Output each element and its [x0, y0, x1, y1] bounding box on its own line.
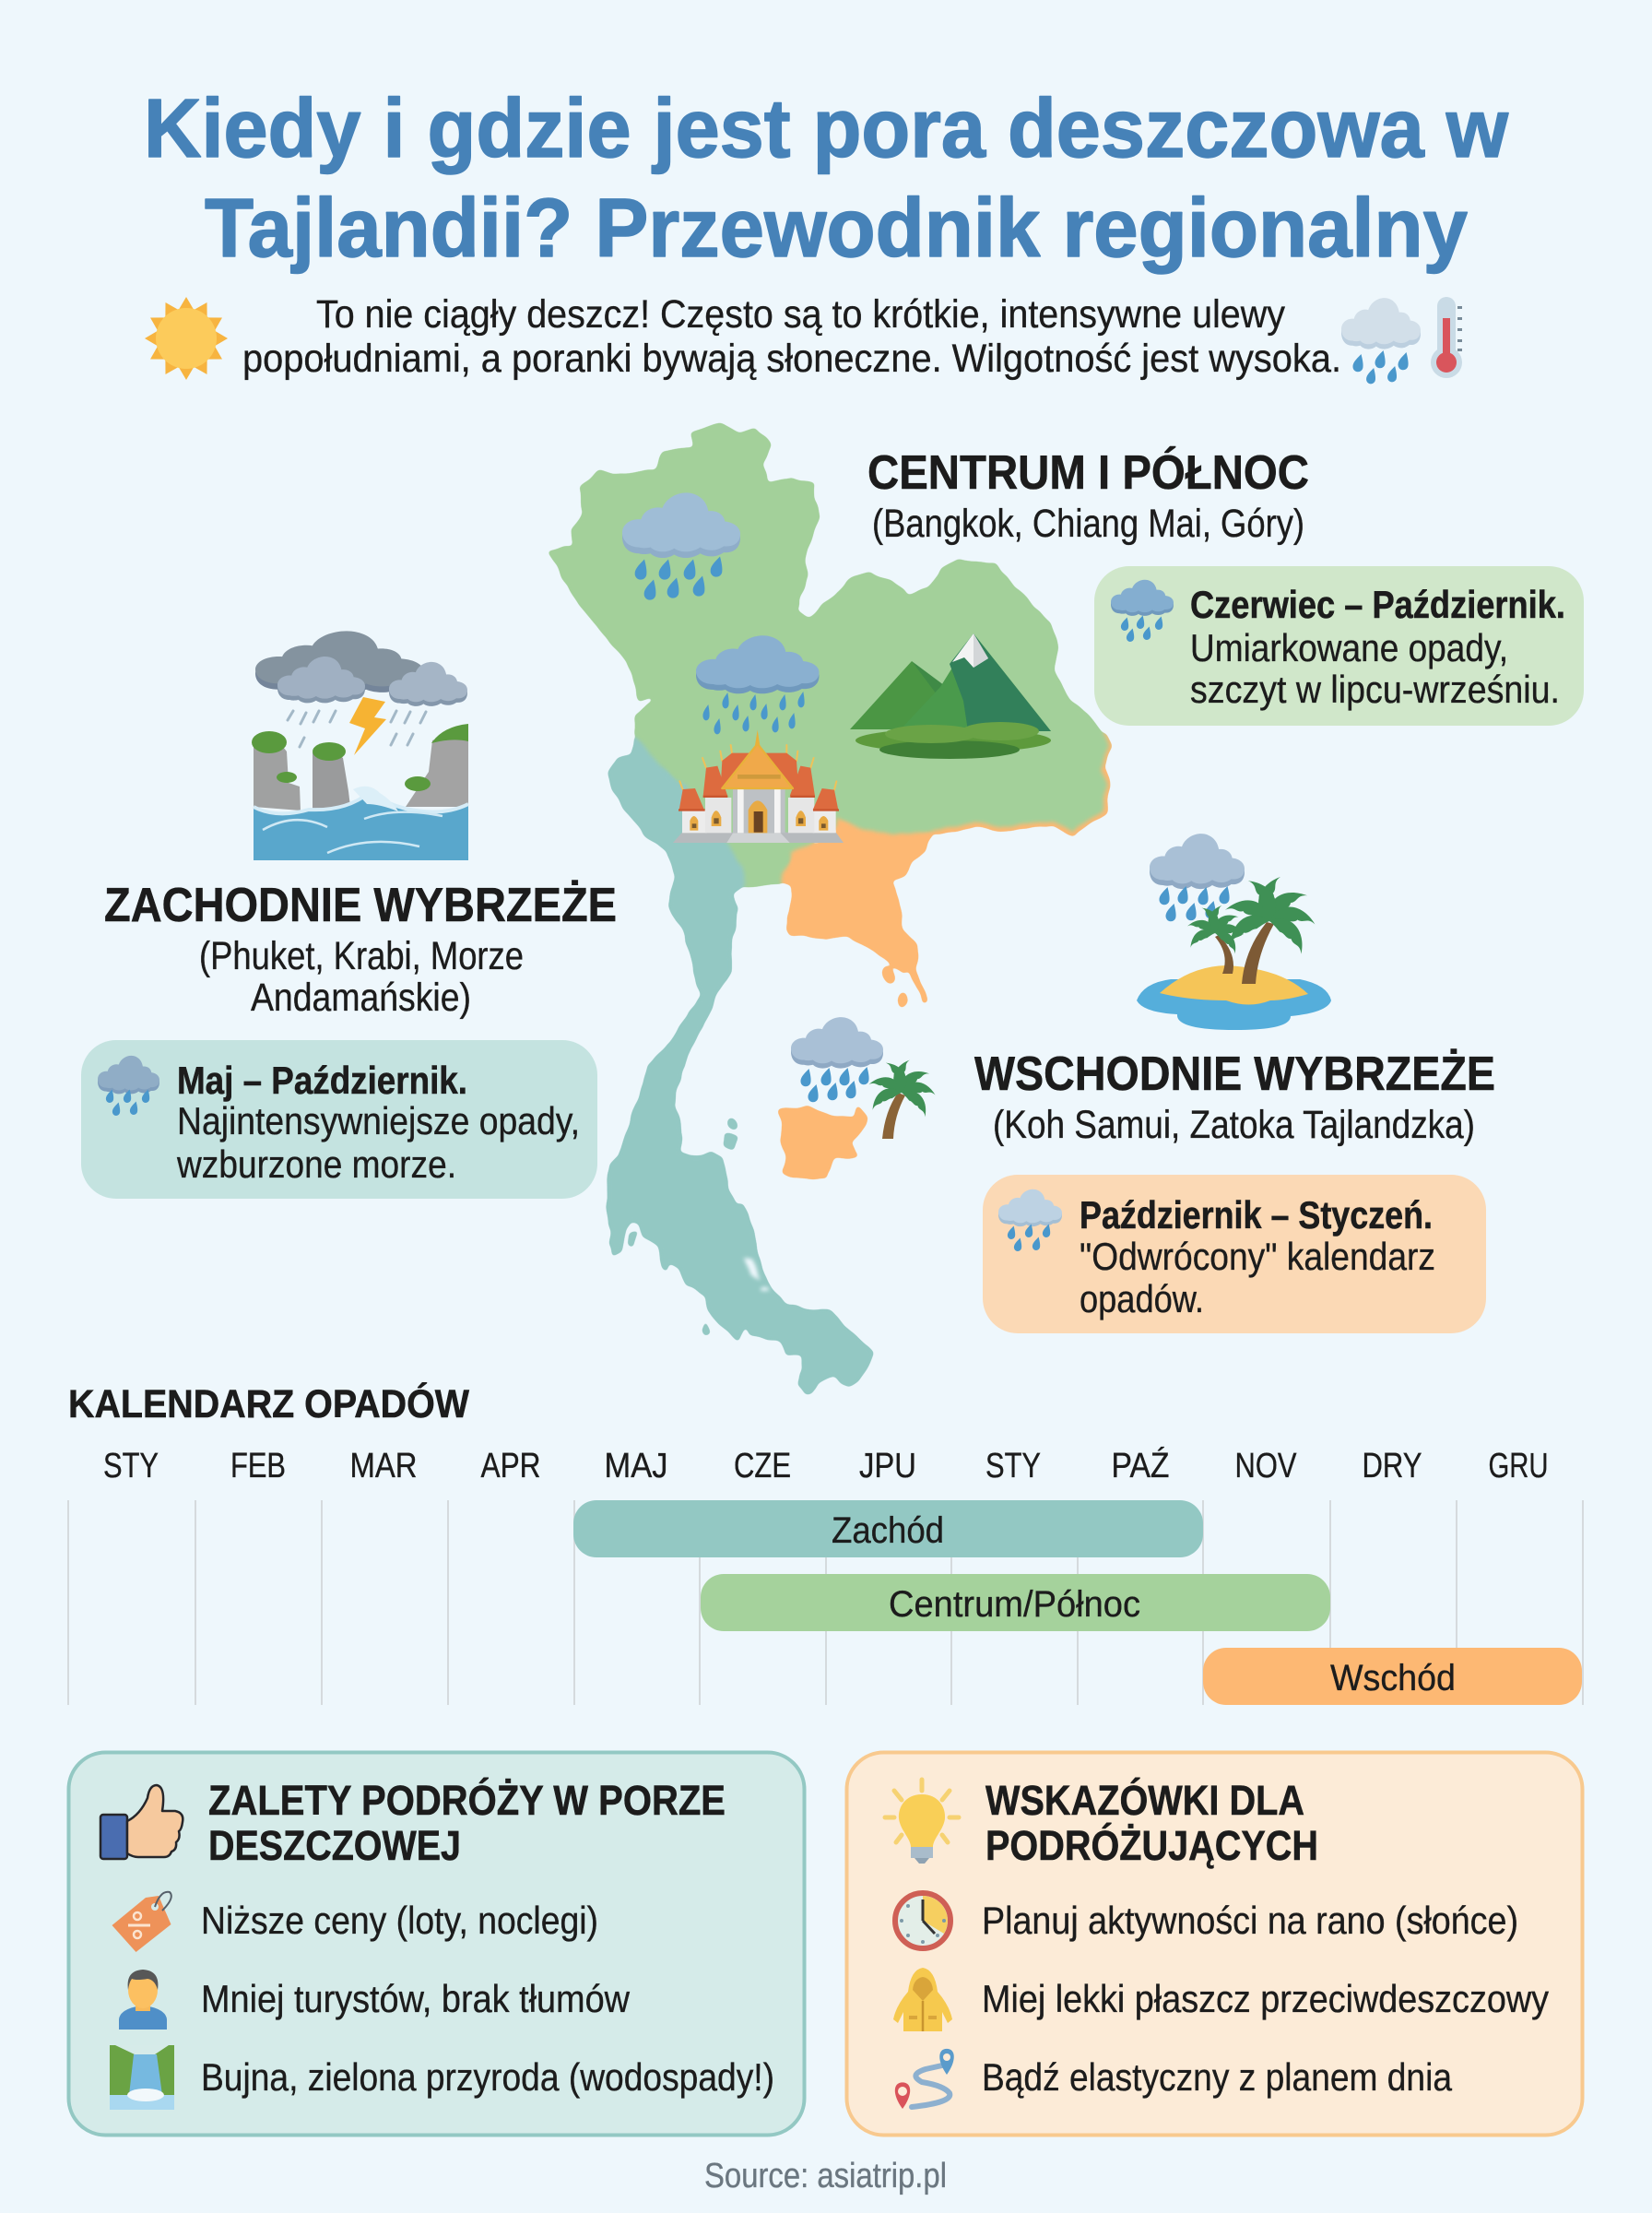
title	[144, 83, 1509, 275]
item: fewer tourists: Mniej turystów, brak tłumów	[201, 1977, 631, 2020]
panel: west coast callout: Maj – Październik.	[177, 1059, 467, 1102]
icon: rain cloud	[98, 1056, 159, 1116]
rainfall calendar	[68, 1381, 1583, 1705]
region heading: west coast: (Phuket, Krabi, Morze	[199, 934, 524, 978]
icon: raincoat	[893, 1968, 952, 2031]
month labels: DRY	[1363, 1447, 1422, 1485]
icon: rain cloud	[1111, 580, 1174, 642]
month labels: APR	[481, 1447, 540, 1485]
region: east coast fringe	[934, 735, 1110, 834]
panel: centre and north callout: szczyt w lipcu-wrześniu.	[1190, 668, 1560, 711]
icon: route with pins	[895, 2049, 954, 2109]
panel: benefits	[68, 1752, 804, 2136]
region heading: centre and north: (Bangkok, Chiang Mai, Góry)	[872, 502, 1304, 546]
panel: centre and north callout: Umiarkowane opady,	[1190, 626, 1508, 669]
panel: centre and north callout: Czerwiec – Październik.	[1190, 583, 1565, 626]
region heading: west coast: ZACHODNIE WYBRZEŻE	[104, 879, 617, 932]
icon: map cloud north	[622, 492, 740, 600]
icon: thermometer	[1431, 297, 1462, 378]
subtitle: To nie ciągły deszcz! Często są to krótkie, intensywne ulewy	[316, 292, 1285, 337]
month labels: JPU	[859, 1447, 916, 1485]
icon: mountain	[850, 633, 1051, 759]
region heading: centre and north: CENTRUM I PÓŁNOC	[867, 446, 1309, 500]
calendar heading: KALENDARZ OPADÓW	[68, 1381, 469, 1426]
heading	[208, 1777, 726, 1869]
panel: east coast callout	[983, 1175, 1486, 1333]
heading: PODRÓŻUJĄCYCH	[985, 1822, 1318, 1869]
month labels: PAŹ	[1112, 1446, 1169, 1485]
month labels: MAJ	[605, 1447, 667, 1485]
month labels: STY	[103, 1447, 159, 1485]
source: Source: asiatrip.pl	[704, 2157, 947, 2195]
month labels: GRU	[1488, 1447, 1549, 1485]
heading: ZALETY PODRÓŻY W PORZE	[208, 1777, 726, 1824]
panel: west coast callout: wzburzone morze.	[176, 1142, 456, 1186]
icon: clock	[895, 1893, 950, 1948]
icon: map cloud centre	[696, 635, 819, 734]
icon: price tag	[112, 1892, 171, 1952]
panel: west coast callout: Najintensywniejsze opady,	[177, 1099, 580, 1142]
icon: waterfall	[110, 2045, 174, 2110]
item: plan for morning: Planuj aktywności na rano (słońce)	[982, 1899, 1518, 1942]
heading: DESZCZOWEJ	[208, 1822, 461, 1869]
title: Kiedy i gdzie jest pora deszczowa w	[144, 83, 1509, 175]
icon: temple	[673, 730, 844, 843]
region heading: east coast: (Koh Samui, Zatoka Tajlandzka)	[993, 1103, 1475, 1147]
month labels: MAR	[350, 1447, 417, 1485]
map of Thailand	[549, 424, 1110, 1394]
bar: west	[573, 1500, 1203, 1557]
subtitle: popołudniami, a poranki bywają słoneczne. Wilgotność jest wysoka.	[242, 337, 1341, 381]
bar: east: Wschód	[1330, 1658, 1456, 1698]
bar: east	[1203, 1648, 1582, 1705]
heading: WSKAZÓWKI DLA	[985, 1777, 1304, 1824]
icon: small island with rain and palm	[779, 1017, 937, 1180]
panel: east coast callout: opadów.	[1080, 1277, 1204, 1320]
icon: light bulb	[885, 1780, 959, 1864]
icon: rain cloud	[998, 1189, 1062, 1251]
month labels	[103, 1446, 1549, 1485]
item: lower prices: Niższe ceny (loty, noclegi)	[201, 1899, 598, 1942]
panel: west coast callout	[81, 1040, 597, 1199]
region heading: west coast	[104, 879, 617, 1020]
title: Tajlandii? Przewodnik regionalny	[205, 183, 1468, 275]
bar: centre and north	[701, 1574, 1330, 1631]
region: west coast	[606, 736, 873, 1394]
month labels: FEB	[230, 1447, 286, 1485]
region heading: centre and north	[867, 446, 1309, 546]
item: raincoat tip: Miej lekki płaszcz przeciwdeszczowy	[982, 1977, 1549, 2020]
panel: east coast callout: Październik – Styczeń.	[1080, 1193, 1433, 1237]
icon: person	[119, 1970, 167, 2030]
icon: rain cloud header	[1341, 298, 1421, 384]
month labels: CZE	[734, 1447, 791, 1485]
item: flexible plan: Bądź elastyczny z planem dnia	[982, 2055, 1453, 2099]
panel: tips	[846, 1752, 1582, 2136]
region heading: east coast	[974, 1047, 1495, 1147]
region heading: east coast: WSCHODNIE WYBRZEŻE	[974, 1047, 1495, 1101]
bar: west: Zachód	[832, 1510, 944, 1551]
icon: island with palms and rain	[1137, 834, 1331, 1030]
icon: thumbs up	[100, 1785, 183, 1859]
subtitle	[242, 292, 1341, 381]
month labels: STY	[985, 1447, 1041, 1485]
icon: storm over cliffs and sea	[252, 631, 468, 860]
region: east coast	[782, 818, 933, 1008]
region: centre and north	[549, 424, 1109, 885]
item: lush nature: Bujna, zielona przyroda (wodospady!)	[201, 2055, 774, 2099]
bar: centre and north: Centrum/Północ	[889, 1584, 1140, 1625]
panel: east coast callout: "Odwrócony" kalendarz	[1080, 1235, 1435, 1278]
icon: sun	[145, 297, 228, 380]
panel: centre and north callout	[1094, 566, 1584, 726]
heading	[985, 1777, 1318, 1869]
region heading: west coast: Andamańskie)	[251, 976, 471, 1020]
month labels: NOV	[1235, 1447, 1297, 1485]
